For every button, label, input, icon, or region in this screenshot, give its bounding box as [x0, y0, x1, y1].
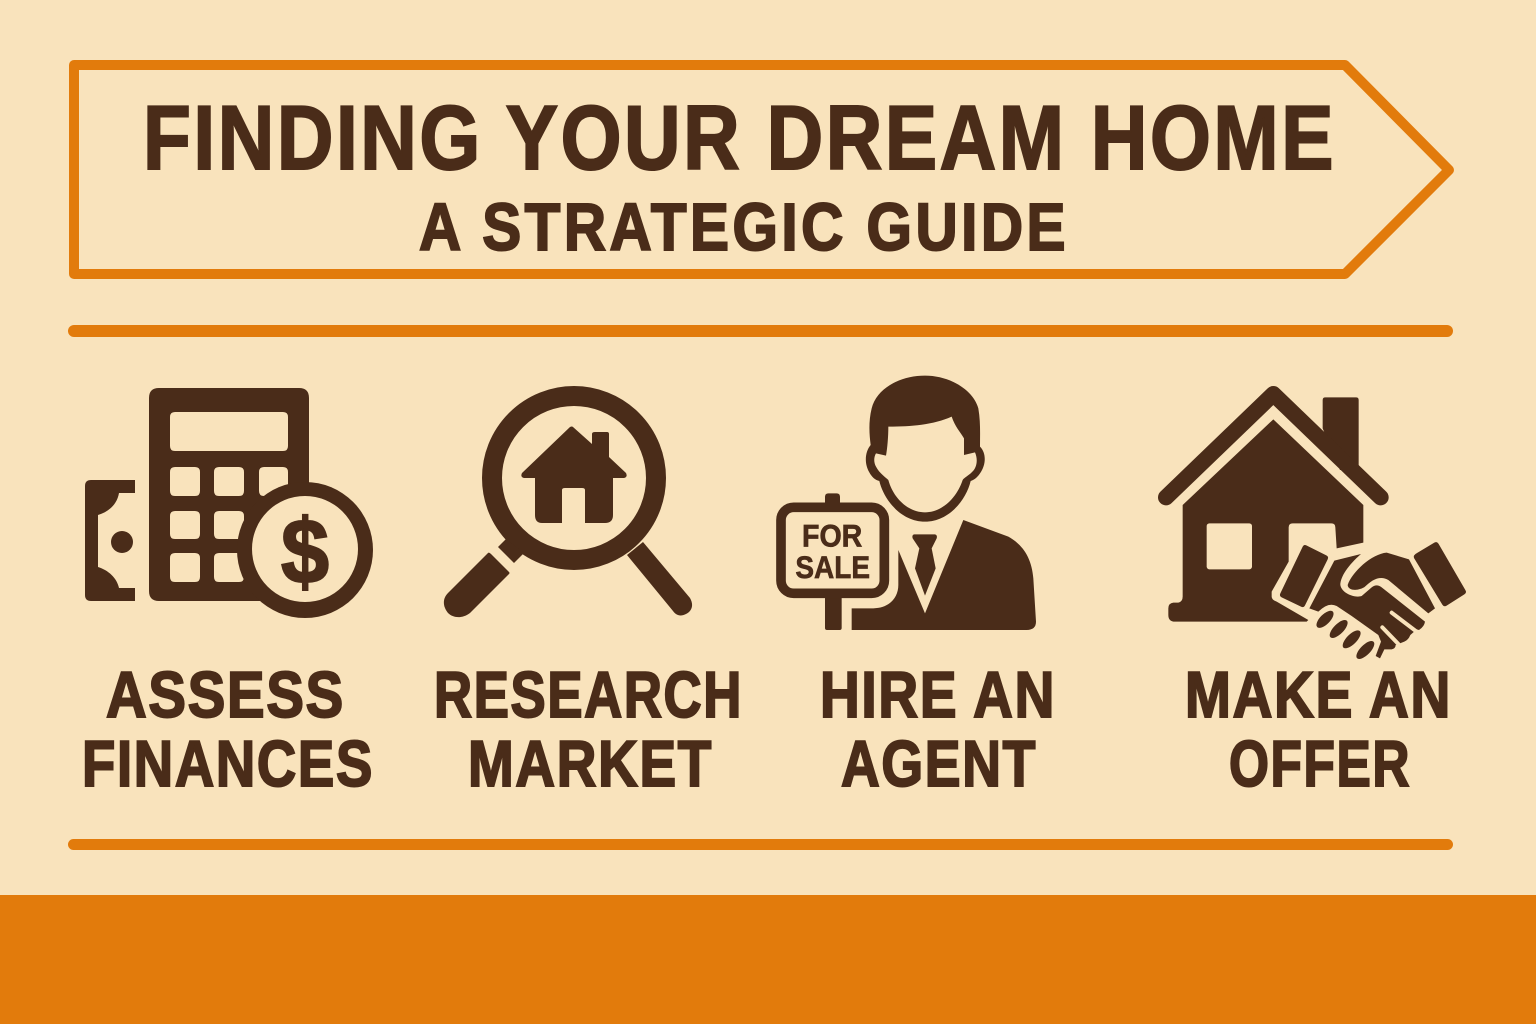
footer band	[0, 895, 1536, 1024]
title banner	[74, 65, 1449, 274]
step 4: make an offer	[1166, 394, 1466, 800]
label: hire an agent	[820, 658, 1056, 800]
for sale sign	[781, 493, 884, 630]
label: make an offer: MAKE AN	[1185, 658, 1452, 731]
icon: calculator with money and coin	[85, 388, 373, 618]
step 2: research market	[434, 396, 743, 800]
label: make an offer	[1185, 658, 1452, 800]
step 3: hire an agent	[781, 376, 1056, 800]
for sale sign: SALE	[795, 550, 870, 585]
label: assess finances: ASSESS	[106, 658, 345, 731]
for sale sign: FOR	[802, 518, 862, 553]
handshake	[1280, 542, 1466, 662]
icon: magnifier with house	[444, 396, 692, 617]
title: FINDING YOUR DREAM HOME	[143, 88, 1336, 189]
label: research market	[434, 658, 743, 800]
label: make an offer: OFFER	[1229, 727, 1411, 800]
dollar sign: $	[281, 501, 329, 603]
subtitle: A STRATEGIC GUIDE	[419, 190, 1069, 265]
coin	[237, 482, 373, 618]
icon: house with handshake	[1166, 394, 1466, 662]
banknote	[85, 480, 135, 601]
label: research market: MARKET	[468, 727, 713, 800]
label: assess finances: FINANCES	[82, 727, 374, 800]
label: hire an agent: AGENT	[841, 727, 1037, 800]
label: assess finances	[82, 658, 374, 800]
label: hire an agent: HIRE AN	[820, 658, 1056, 731]
icon: agent with for sale sign	[781, 376, 1036, 630]
label: research market: RESEARCH	[434, 658, 743, 731]
step 1: assess finances	[82, 388, 374, 800]
